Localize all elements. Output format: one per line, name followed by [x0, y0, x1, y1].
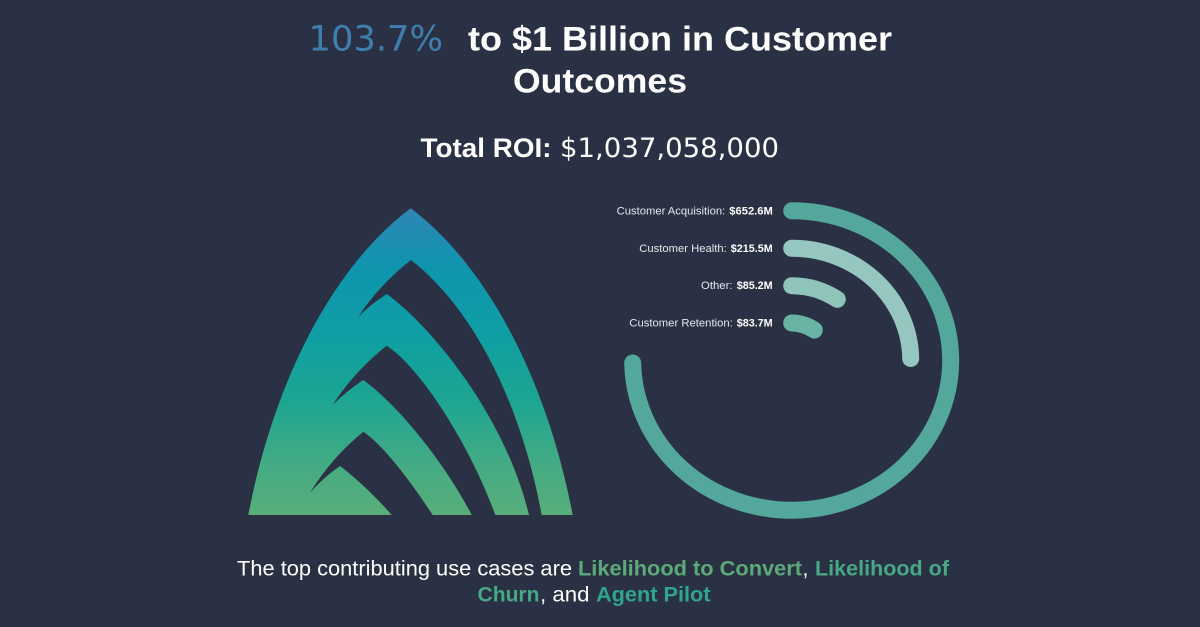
label: Customer Retention: Customer Retention: [629, 318, 733, 330]
footer text: Churn [478, 584, 540, 607]
chart labels [617, 206, 773, 330]
label: Other: $85.2M [737, 280, 773, 292]
label: Customer Health [639, 243, 773, 255]
label: Customer Health: $215.5M [731, 243, 773, 255]
total ROI: Total ROI: [420, 133, 552, 163]
label: Other: Other: [701, 280, 732, 292]
label: Customer Retention: $83.7M [737, 318, 773, 330]
label: Customer Acquisition: $652.6M [729, 206, 773, 218]
title [308, 20, 892, 101]
footer text [237, 558, 950, 607]
arc: Customer Health [792, 248, 911, 358]
label: Other [701, 280, 773, 292]
arc: Customer Retention [792, 323, 814, 330]
footer text: Agent Pilot [596, 584, 711, 607]
total ROI [420, 133, 779, 164]
footer text: The top contributing use cases are [237, 558, 572, 581]
footer text: Likelihood of [815, 558, 950, 581]
title: Outcomes [513, 63, 687, 101]
total ROI: $1,037,058,000 [560, 133, 779, 164]
label: Customer Acquisition [617, 206, 773, 218]
radial bar chart [633, 211, 951, 510]
label: Customer Health: Customer Health: [639, 243, 727, 255]
title: to $1 Billion in Customer [468, 21, 892, 59]
arc: Customer Acquisition [633, 211, 951, 510]
icon: arch logo [248, 208, 573, 515]
footer text: Likelihood to Convert [578, 558, 802, 581]
footer text: , [802, 558, 808, 581]
label: Customer Acquisition: Customer Acquisition: [617, 206, 725, 218]
arc: Other [792, 286, 837, 299]
footer text: , and [540, 584, 590, 607]
title: 103.7% [308, 20, 443, 60]
